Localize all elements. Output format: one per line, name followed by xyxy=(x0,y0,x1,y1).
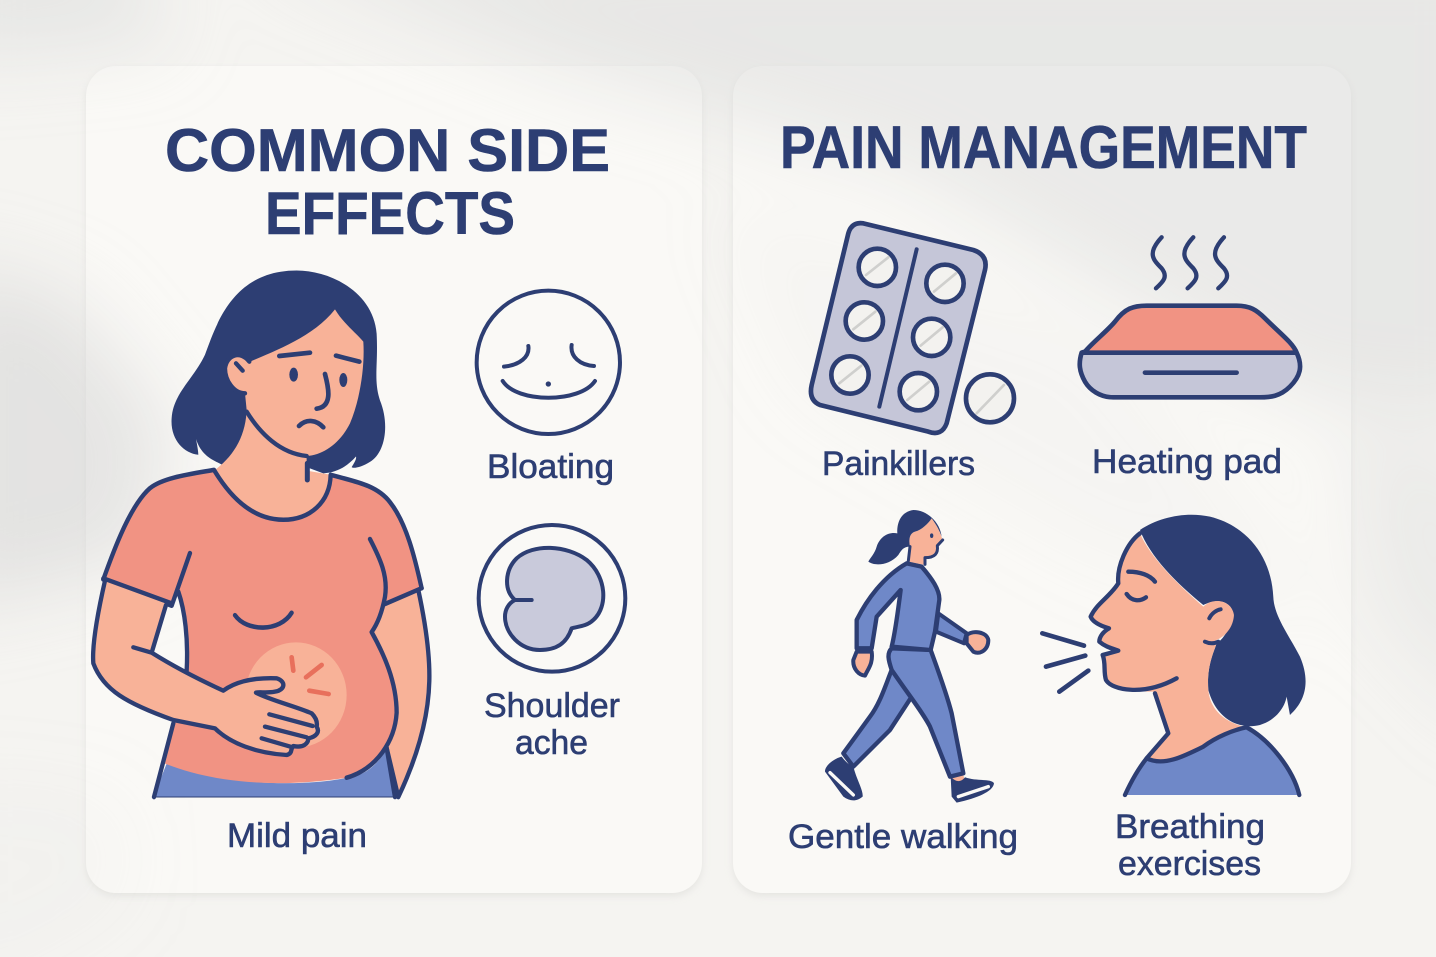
illustration: woman with mild abdominal pain xyxy=(93,271,429,797)
label: breathing exercises xyxy=(1115,808,1265,883)
label: shoulder ache: Shoulder xyxy=(484,687,620,725)
illustration: woman walking xyxy=(825,510,994,803)
panel: pain management card xyxy=(733,66,1351,893)
label: heating pad: Heating pad xyxy=(1092,443,1282,481)
illustration: profile breathing out xyxy=(1042,515,1306,795)
heading: pain management: PAIN MANAGEMENT xyxy=(780,114,1307,181)
heading: common side effects: EFFECTS xyxy=(265,180,515,247)
icon: shoulder ache xyxy=(479,525,625,672)
panel: common side effects xyxy=(93,117,625,855)
label: shoulder ache xyxy=(484,687,620,762)
label: breathing exercises: Breathing xyxy=(1115,808,1265,846)
label: painkillers: Painkillers xyxy=(822,445,975,483)
heading: common side effects: COMMON SIDE xyxy=(165,117,610,184)
label: shoulder ache: ache xyxy=(515,724,588,762)
icon: painkillers blister pack xyxy=(811,223,1014,433)
icon: heating pad with steam xyxy=(1080,237,1300,397)
label: bloating: Bloating xyxy=(487,448,614,486)
panel: common side effects card xyxy=(86,66,702,893)
icon: bloating face xyxy=(477,291,620,434)
label: mild pain: Mild pain xyxy=(227,817,367,855)
label: gentle walking: Gentle walking xyxy=(788,818,1018,856)
panel: pain management xyxy=(780,114,1307,883)
heading: common side effects xyxy=(165,117,610,247)
label: breathing exercises: exercises xyxy=(1118,845,1261,883)
